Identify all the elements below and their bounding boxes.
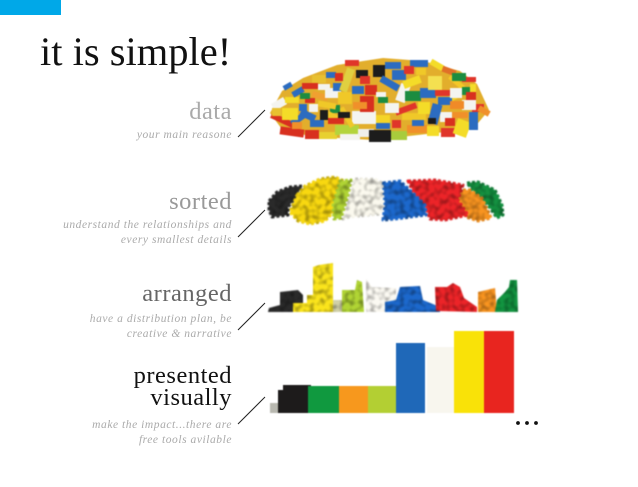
heading: presented visually: visually (150, 384, 232, 411)
bar: grey base (270, 403, 280, 413)
caption: presented visually: free tools avilable (139, 434, 232, 446)
ellipsis (516, 421, 538, 425)
step: presented visually (92, 362, 265, 446)
heading: data: data (189, 98, 232, 125)
step: data (136, 98, 265, 141)
caption: presented visually: make the impact...there are (92, 419, 232, 431)
step: arranged (90, 280, 265, 340)
caption: arranged: have a distribution plan, be (90, 313, 232, 325)
bar: red (484, 331, 514, 413)
image: mixed pile of lego bricks (270, 58, 491, 142)
connector: sorted (238, 210, 265, 237)
connector: data (238, 110, 265, 137)
bar chart: lego bricks stacked by colour (270, 331, 514, 413)
bar: green (308, 386, 339, 413)
caption: arranged: creative & narrative (127, 328, 232, 340)
bar: black (278, 385, 311, 413)
connector: arranged (238, 303, 265, 330)
caption: sorted: understand the relationships and (63, 219, 232, 231)
image: bricks arranged in rough stacks (268, 263, 518, 312)
accent bar (0, 0, 61, 15)
bar: white (427, 347, 454, 413)
bar: yellow (454, 331, 484, 413)
bar: blue (396, 343, 425, 413)
bar: lime (368, 386, 397, 413)
heading: sorted: sorted (169, 188, 232, 215)
bar: orange (339, 386, 368, 413)
caption: data: your main reasone (136, 129, 232, 141)
caption: sorted: every smallest details (121, 234, 232, 246)
title: it is simple! (40, 29, 231, 74)
heading: arranged: arranged (142, 280, 232, 307)
heading: presented visually: presented (134, 362, 232, 389)
step: sorted (63, 188, 265, 246)
image: bricks sorted by colour (269, 177, 503, 224)
connector: presented visually (238, 397, 265, 424)
